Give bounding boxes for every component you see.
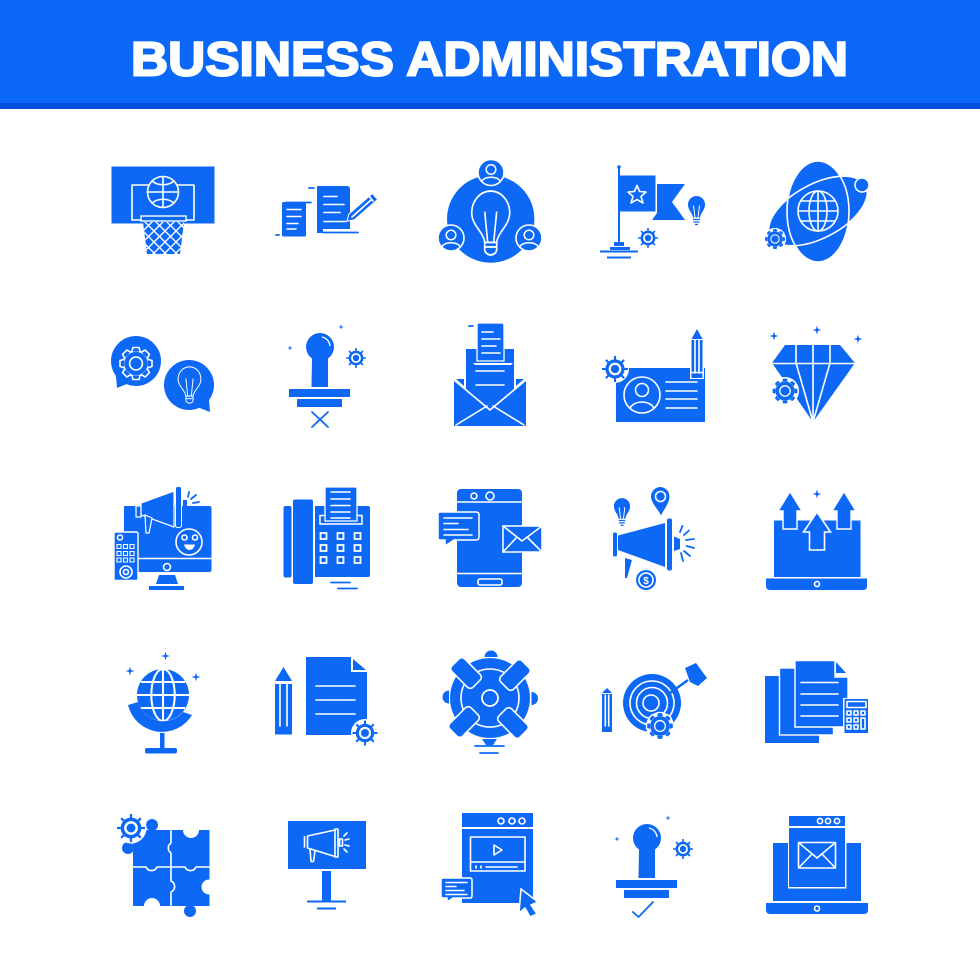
title: BUSINESS ADMINISTRATION <box>131 32 848 86</box>
icon: browser window with video <box>441 813 538 917</box>
header banner <box>0 0 980 109</box>
icon: megaphone with bulb, pin and coin <box>613 487 694 590</box>
icon: right user <box>516 225 542 251</box>
icon: fax machine <box>284 487 370 588</box>
icon: diamond with gear <box>770 326 862 422</box>
icon: billboard with megaphone <box>288 821 366 910</box>
icon: flag with star, bulb and gear <box>600 165 705 258</box>
icon: rubber stamp with cross <box>287 324 366 427</box>
icon: envelope with letter <box>454 323 526 426</box>
icon: speech bubbles with gear and bulb <box>111 336 214 412</box>
icon: monitor with megaphone and remote <box>114 486 212 590</box>
icon: laptop with mail window <box>766 815 868 914</box>
icon: id card with gear and pencil <box>601 329 705 422</box>
icon: documents and pencil <box>276 186 378 236</box>
icon: rubber stamp with check <box>614 815 693 917</box>
icon: stacked documents and calculator <box>765 660 869 743</box>
icon: target with dart and pencil <box>602 663 707 740</box>
icon: pencil and document with gear <box>275 657 379 747</box>
icon: desk globe <box>126 652 200 754</box>
icon: globe in orbit <box>758 161 878 262</box>
icon: idea with three users <box>438 160 542 263</box>
icon: top user <box>478 160 504 186</box>
icon: round gear wheel <box>443 650 538 753</box>
icon: smartphone with chat and mail <box>438 489 542 587</box>
icon: laptop with upward arrows <box>766 490 867 590</box>
icon: left user <box>438 225 464 251</box>
icon: basketball hoop <box>112 166 214 254</box>
icon: megaphone with bulb, pin and coin: $ <box>643 576 649 587</box>
icon: puzzle with gear <box>116 812 216 917</box>
